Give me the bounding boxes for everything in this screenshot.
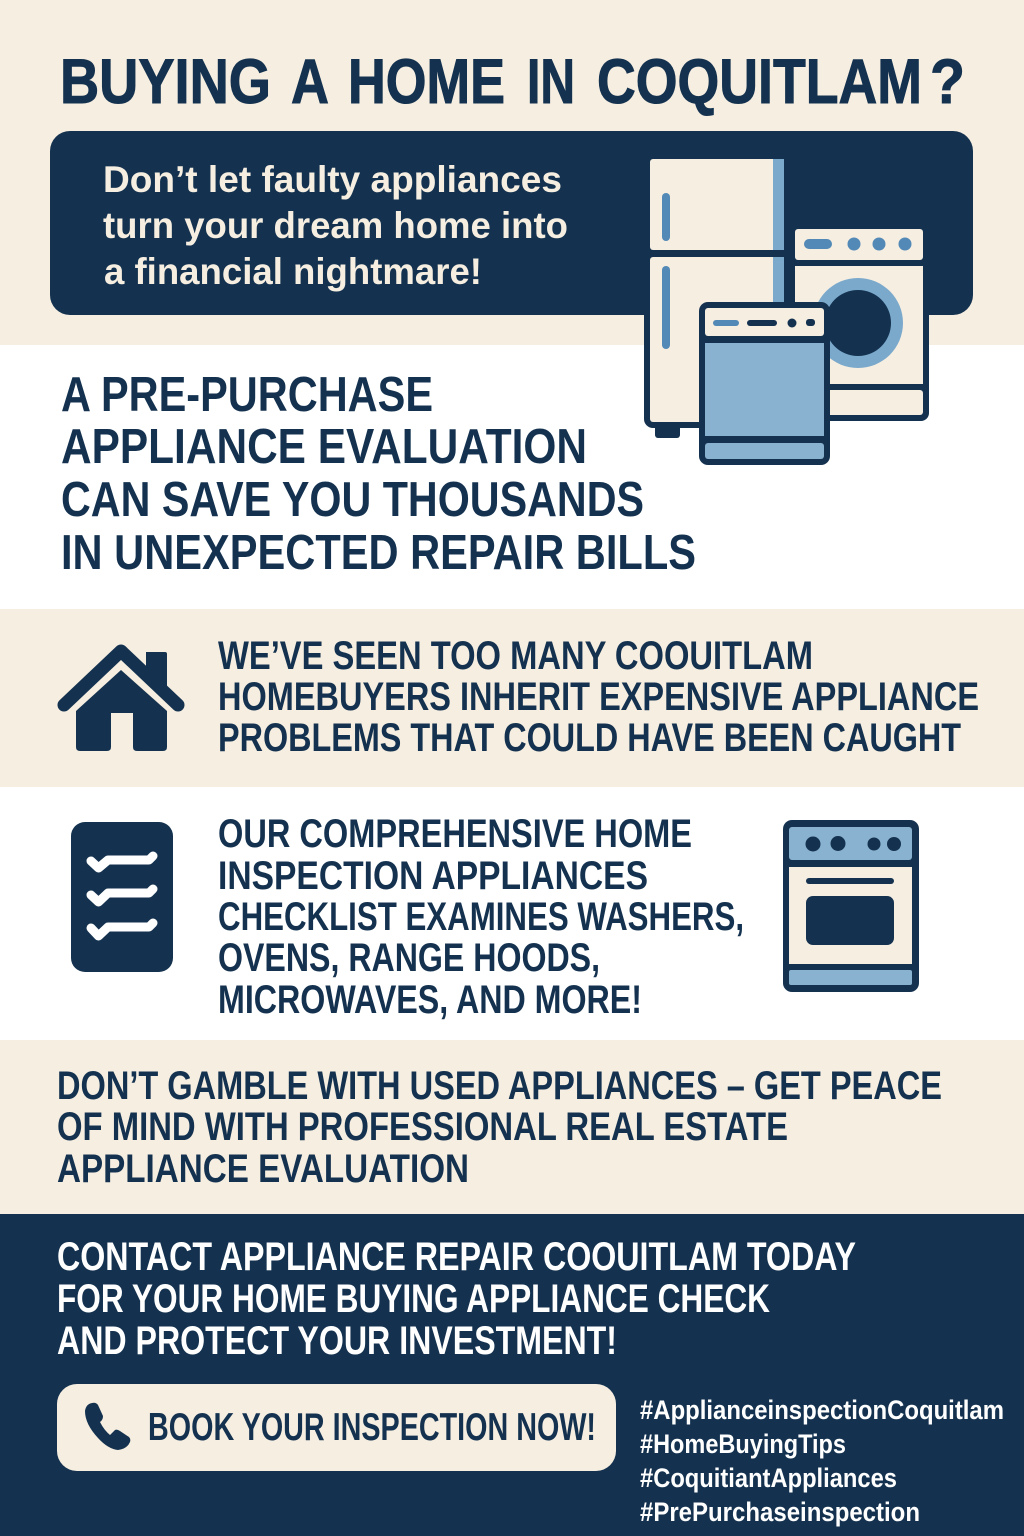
text: checklist description: MICROWAVES, AND MORE! <box>218 978 642 1022</box>
heading: pre-purchase evaluation: CAN SAVE YOU THOUSANDS <box>61 473 644 527</box>
text: checklist description: INSPECTION APPLIANCES <box>218 854 648 898</box>
text: homebuyers warning <box>218 634 979 760</box>
title: HOME <box>348 47 505 117</box>
text: homebuyers warning: WE’VE SEEN TOO MANY COOUITLAM <box>218 634 813 678</box>
icon: checklist <box>71 822 173 972</box>
hashtags: #PrePurchaseinspection <box>640 1497 920 1527</box>
text: call to action: AND PROTECT YOUR INVESTMENT! <box>57 1319 617 1363</box>
title: BUYING <box>60 47 271 117</box>
text: call to action: CONTACT APPLIANCE REPAIR COOUITLAM TODAY <box>57 1235 856 1279</box>
callout text <box>103 159 568 292</box>
hashtags: #HomeBuyingTips <box>640 1429 846 1459</box>
heading: pre-purchase evaluation: APPLIANCE EVALUATION <box>61 420 587 474</box>
text: call to action: FOR YOUR HOME BUYING APPLIANCE CHECK <box>57 1277 770 1321</box>
icon: dishwasher <box>699 302 830 465</box>
button: book inspection <box>57 1384 616 1471</box>
hashtags: #CoquitiantAppliances <box>640 1463 897 1493</box>
icon: house <box>64 651 178 751</box>
title: COQUITLAM <box>597 47 922 117</box>
heading: pre-purchase evaluation <box>61 368 696 580</box>
text: peace of mind: OF MIND WITH PROFESSIONAL REAL ESTATE <box>57 1105 788 1149</box>
title: A <box>291 47 329 117</box>
panel: navy callout <box>50 131 973 315</box>
title: IN <box>527 47 575 117</box>
title <box>60 47 965 117</box>
text: checklist description: CHECKLIST EXAMINES WASHERS, <box>218 895 744 939</box>
callout text: turn your dream home into <box>103 205 568 246</box>
heading: pre-purchase evaluation: A PRE-PURCHASE <box>61 368 433 422</box>
text: call to action <box>57 1235 856 1363</box>
icon: refrigerator <box>644 154 791 438</box>
icon: oven <box>783 820 919 992</box>
button label: BOOK YOUR INSPECTION NOW! <box>148 1406 596 1449</box>
text: checklist description: OUR COMPREHENSIVE HOME <box>218 812 692 856</box>
title: ? <box>930 47 965 117</box>
icon: appliances group <box>644 154 929 465</box>
text: peace of mind: APPLIANCE EVALUATION <box>57 1147 469 1191</box>
icon: washing machine <box>789 224 929 421</box>
text: checklist description <box>218 812 744 1022</box>
callout text: a financial nightmare! <box>104 251 482 292</box>
heading: pre-purchase evaluation: IN UNEXPECTED REPAIR BILLS <box>61 526 696 580</box>
text: checklist description: OVENS, RANGE HOODS, <box>218 936 600 980</box>
icon: phone <box>85 1403 130 1450</box>
text: peace of mind <box>57 1064 942 1191</box>
hashtags <box>640 1395 1004 1527</box>
callout text: Don’t let faulty appliances <box>103 159 562 200</box>
